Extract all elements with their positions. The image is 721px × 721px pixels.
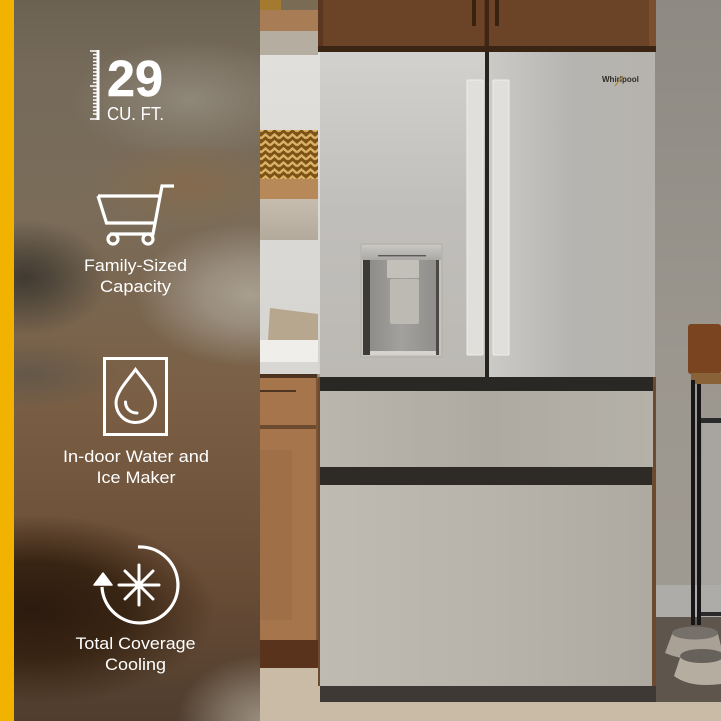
blurred side panel xyxy=(14,0,260,721)
feature: family-sized capacity xyxy=(84,186,187,296)
label: In-door Water and xyxy=(63,448,209,466)
feature: total coverage cooling: Cooling xyxy=(105,656,166,674)
lower wood cabinet xyxy=(260,374,318,668)
icon: measuring scale xyxy=(90,50,98,120)
upper wood cabinet xyxy=(318,0,656,51)
left door handle xyxy=(467,80,483,355)
icon: shopping cart xyxy=(98,186,174,244)
capacity number: 29 xyxy=(107,50,163,107)
feature: family-sized capacity: Capacity xyxy=(100,278,172,296)
icon: snowflake with circular arrow xyxy=(94,547,178,623)
feature: total coverage cooling xyxy=(76,547,196,674)
feature: capacity xyxy=(90,50,164,124)
capacity unit: CU. FT. xyxy=(107,104,164,124)
refrigerator xyxy=(318,46,656,686)
upper drawer gap xyxy=(320,377,653,391)
icon: water drop in door xyxy=(104,358,166,434)
background photo: kitchen xyxy=(260,0,721,721)
label: Family-Sized xyxy=(84,257,187,275)
water and ice dispenser xyxy=(361,244,442,357)
label: Total Coverage xyxy=(76,635,196,653)
upper freezer drawer xyxy=(320,391,653,467)
feature: in-door water and ice maker: Ice Maker xyxy=(96,469,176,487)
open shelving with basket xyxy=(260,0,320,374)
feature: in-door water and ice maker xyxy=(63,358,209,487)
lower drawer gap xyxy=(320,467,652,485)
right door xyxy=(489,52,655,377)
right door handle xyxy=(493,80,509,355)
brand logo: Whirlpool xyxy=(602,75,639,84)
lower freezer drawer xyxy=(320,485,652,686)
yellow accent bar xyxy=(0,0,14,721)
floor xyxy=(260,585,721,721)
pet bowls xyxy=(665,626,721,685)
side table and bag xyxy=(688,324,721,625)
left door xyxy=(320,52,485,377)
